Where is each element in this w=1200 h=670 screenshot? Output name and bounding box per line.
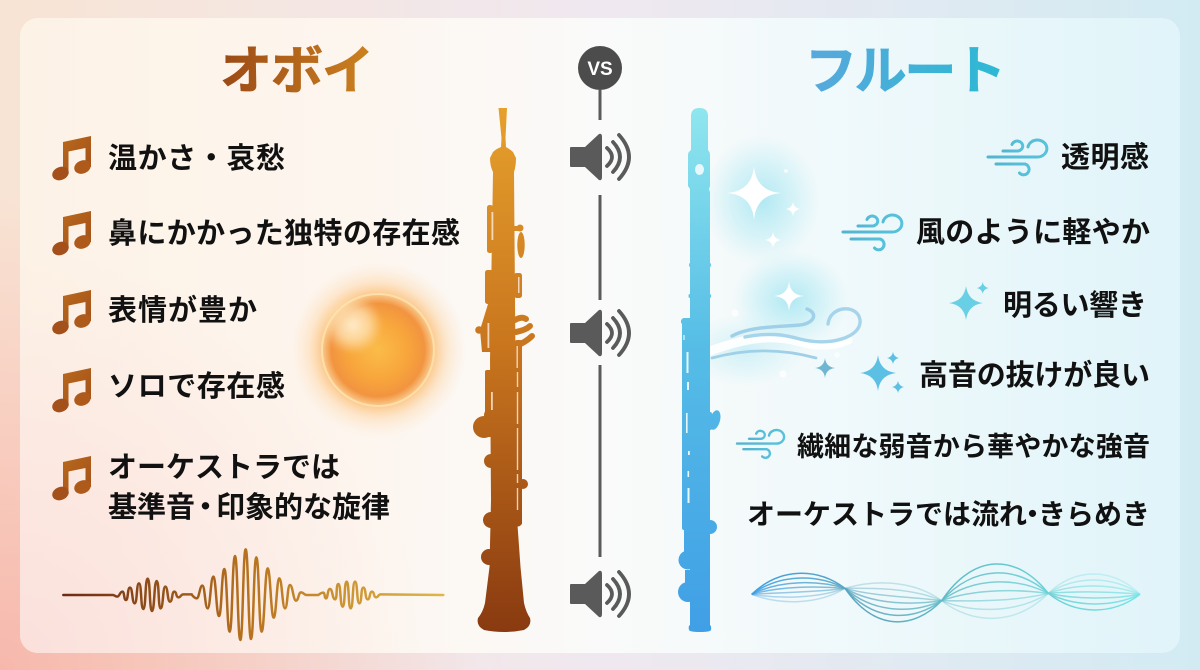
- panel: oboe: [50, 43, 532, 640]
- icon: speaker bottom: [570, 571, 629, 617]
- flute waveform: [752, 564, 1140, 622]
- trait: expressive: [50, 290, 257, 337]
- trait: warmth: 温かさ・哀愁: [108, 142, 285, 175]
- trait: warmth: [50, 136, 285, 183]
- flute silhouette: [678, 108, 722, 632]
- panel: flute: [678, 43, 1150, 632]
- trait: orchestra role: [50, 452, 390, 524]
- trait: orchestra flow: オーケストラでは流れ・きらめき: [747, 499, 1150, 530]
- icon: speaker top: [570, 134, 629, 180]
- trait: solo presence: ソロで存在感: [108, 370, 285, 403]
- trait: transparency: 透明感: [1061, 141, 1149, 174]
- trait: delicate to brilliant: 繊細な弱音から華やかな強音: [797, 432, 1150, 462]
- trait: solo presence: [50, 368, 285, 415]
- flute embouchure and key slits: [683, 164, 704, 503]
- flute title: フルート: [805, 43, 1006, 101]
- trait: clear high notes: [860, 352, 1150, 393]
- wind swirl decoration: [710, 309, 860, 358]
- oboe key slits: [488, 212, 520, 510]
- trait: expressive: 表情が豊か: [108, 293, 257, 327]
- icon: speaker middle: [570, 310, 629, 356]
- trait: nasal presence: 鼻にかかった独特の存在感: [108, 217, 460, 250]
- connector lines: [598, 90, 602, 557]
- trait: transparency: [988, 140, 1149, 175]
- icon: glowing orange orb: [290, 262, 466, 438]
- flute traits list: [737, 140, 1150, 530]
- vs column: [570, 46, 629, 617]
- oboe waveform: [63, 549, 443, 640]
- sparkle glow decoration: [685, 134, 848, 386]
- trait: bright tone: [949, 282, 1147, 322]
- trait: bright tone: 明るい響き: [1003, 289, 1147, 322]
- trait: orchestra role: オーケストラでは: [108, 452, 340, 484]
- trait: light as wind: 風のように軽やか: [916, 216, 1150, 249]
- vs badge: [578, 46, 622, 90]
- oboe silhouette: [473, 108, 532, 632]
- trait: nasal presence: [50, 211, 460, 258]
- oboe title: オボイ: [220, 43, 374, 101]
- trait: clear high notes: 高音の抜けが良い: [919, 358, 1150, 392]
- trait: orchestra role: 基準音・印象的な旋律: [108, 491, 390, 524]
- vs badge: VS: [587, 59, 613, 80]
- oboe traits list: [50, 136, 460, 524]
